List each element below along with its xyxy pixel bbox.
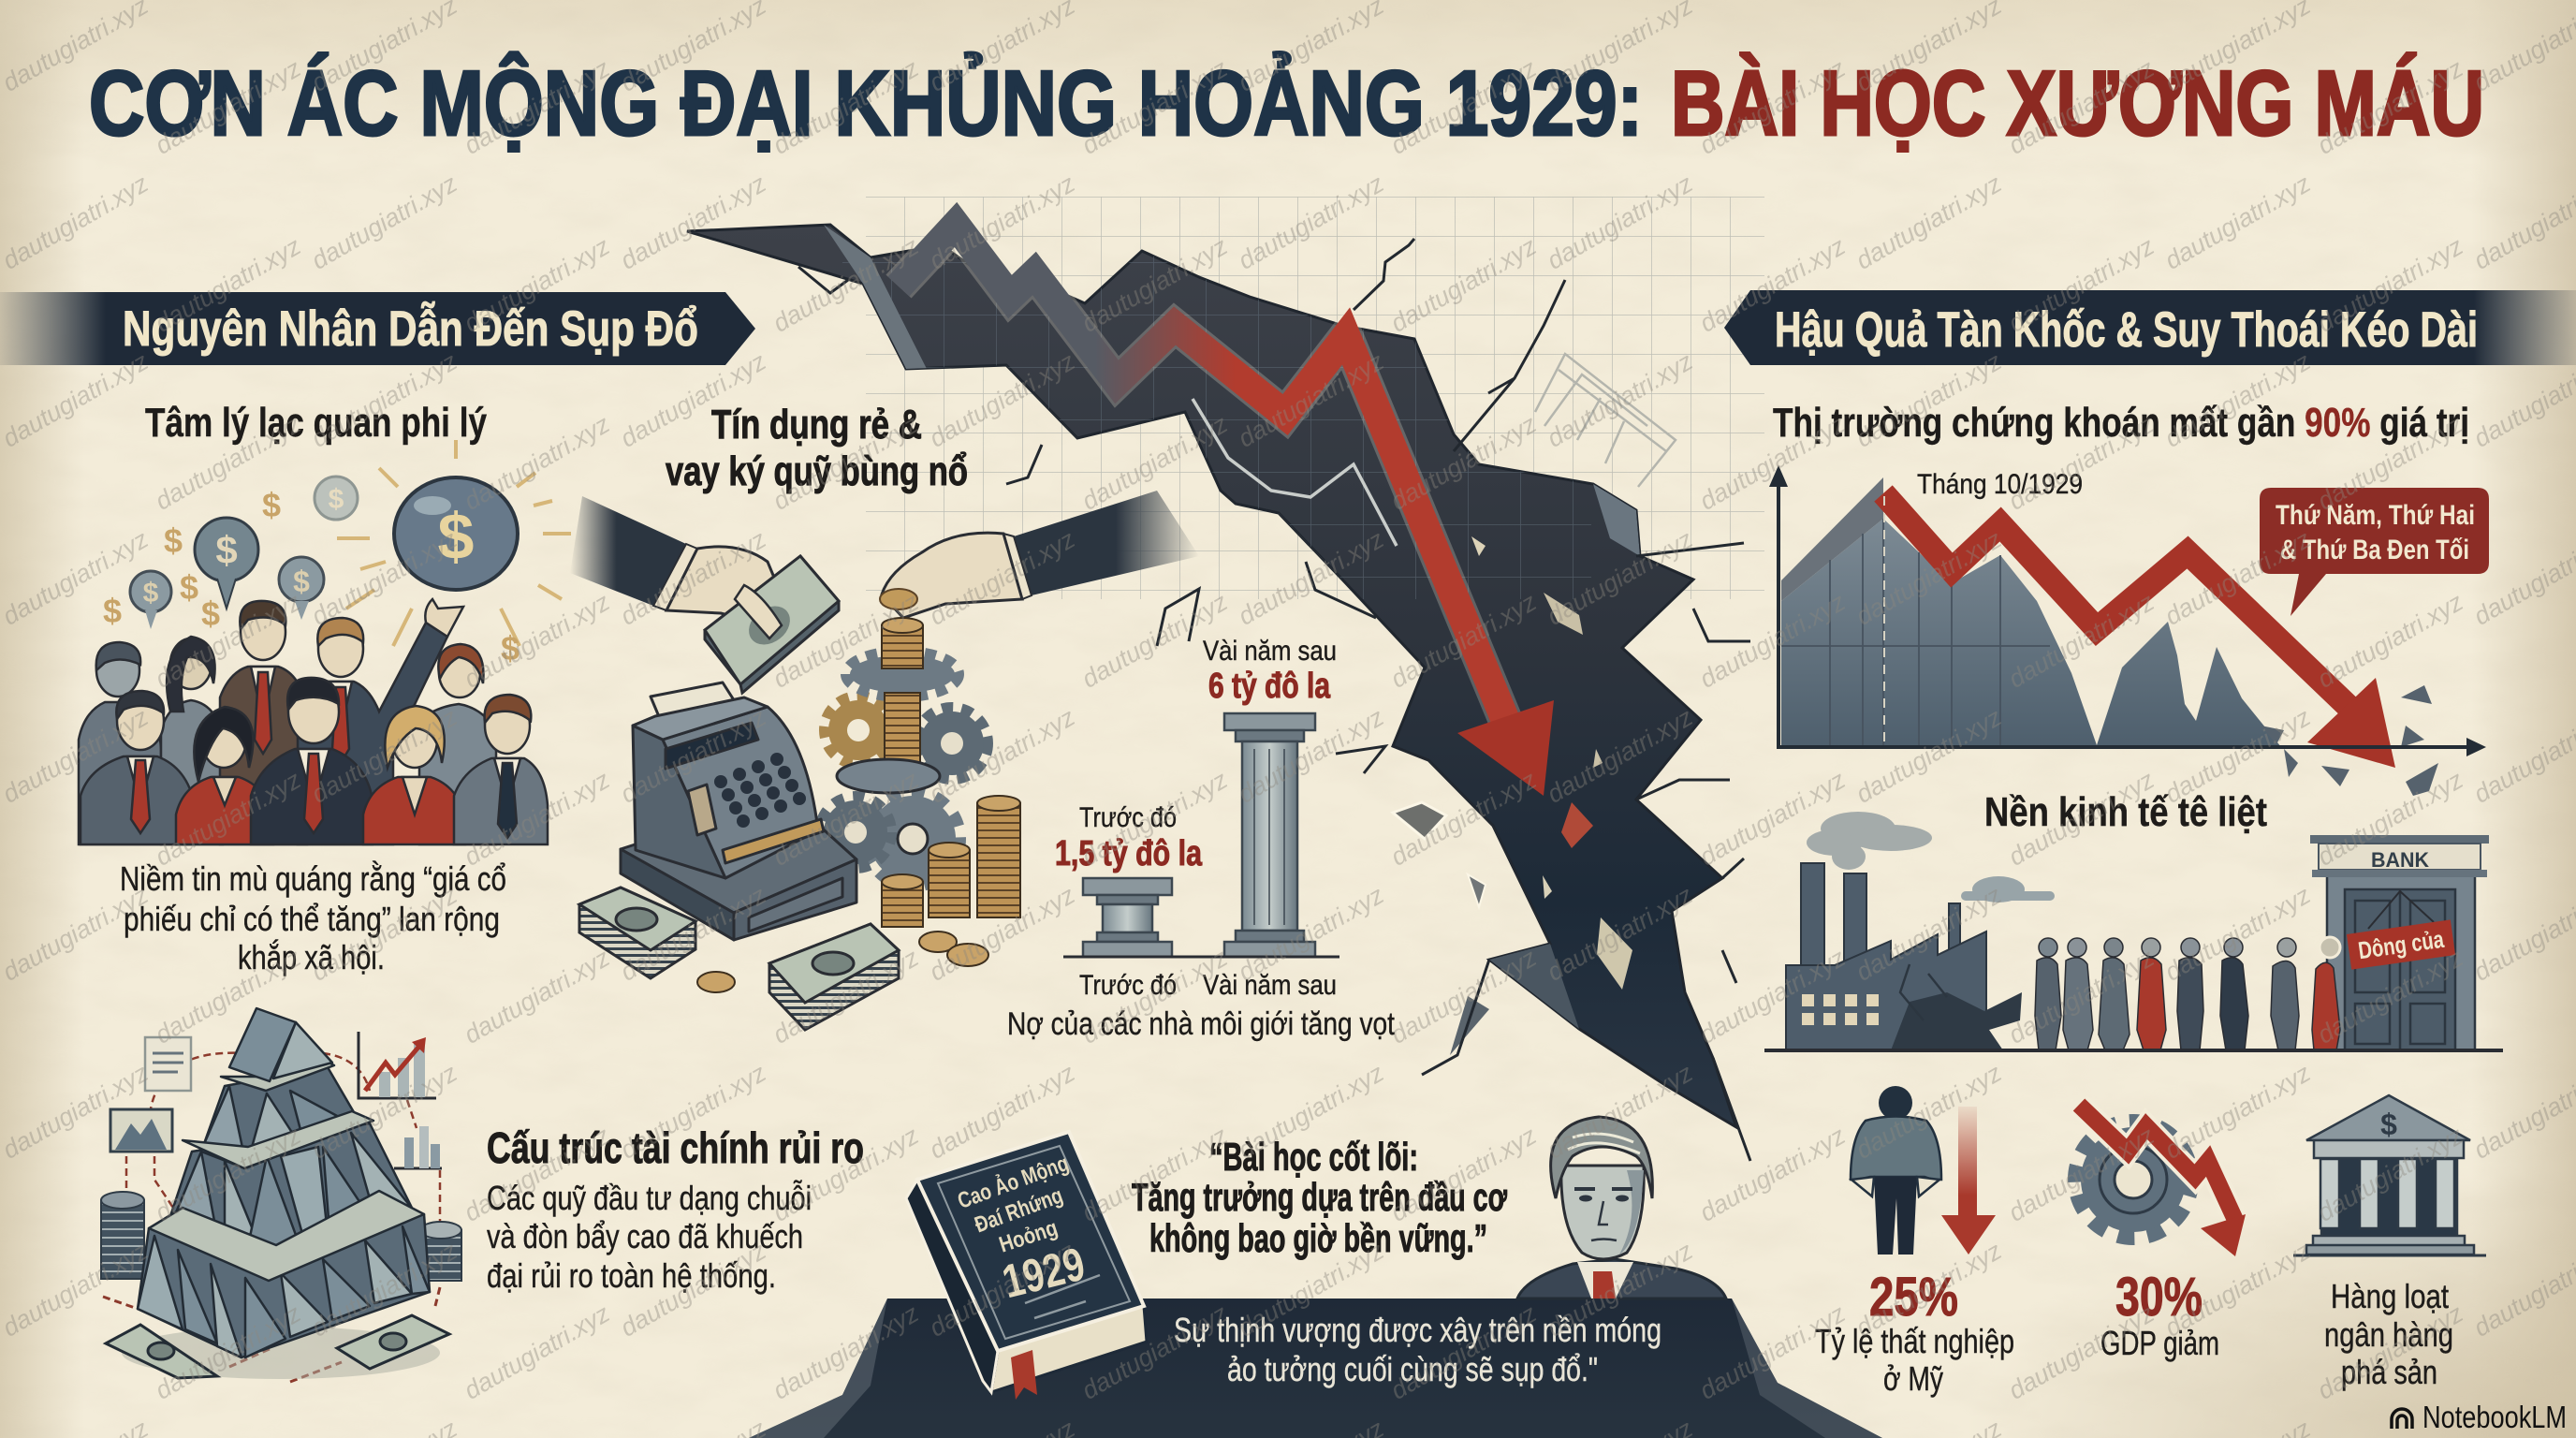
cards	[122, 1008, 440, 1379]
crack body	[687, 225, 1736, 1127]
callout: black days: & Thứ Ba Đen Tối	[2280, 535, 2469, 565]
chart: broker debt pillars: Vài năm sau	[1203, 970, 1337, 1001]
book: lessons of 1929: Cao Ảo Mộng	[954, 1149, 1072, 1214]
heading: market lost 90 percent: Thị trường chứng khoán mất gần 90% giá trị	[1773, 400, 2469, 446]
hairline cracks	[798, 239, 1750, 1161]
callout: black days: Thứ Năm, Thứ Hai	[2276, 500, 2475, 531]
chart: broker debt pillars	[1007, 636, 1395, 1042]
chart: broker debt pillars: Vài năm sau	[1203, 636, 1337, 667]
stat: bank failures	[2293, 1095, 2486, 1391]
stat: unemployment: Tỷ lệ thất nghiệp	[1815, 1322, 2014, 1360]
chart: broker debt pillars: 6 tỷ đô la	[1208, 667, 1331, 706]
bubbles: $	[438, 500, 474, 573]
body text: blind belief	[120, 859, 506, 976]
bubbles: $	[501, 629, 520, 668]
heading: irrational optimism: Tâm lý lạc quan phi lý	[145, 400, 487, 446]
illustration: factory, queue and closed bank	[1764, 812, 2503, 1050]
book: lessons of 1929: Hoỏng	[996, 1215, 1061, 1258]
gear tower	[820, 652, 988, 886]
body text: blind belief: phiếu chỉ có thể tăng” lan rộng	[124, 900, 500, 938]
heading: cheap credit: Tín dụng rẻ &	[711, 402, 922, 448]
quote: core lesson: không bao giờ bền vững.”	[1149, 1216, 1487, 1260]
stat: GDP: 30%	[2115, 1267, 2203, 1328]
coin stacks beside house	[101, 1192, 461, 1281]
quote: core lesson: Tăng trưởng dựa trên đầu cơ	[1132, 1175, 1507, 1219]
closed bank: BANK	[2371, 848, 2429, 872]
cash register	[621, 682, 856, 940]
illustration: crowd and bubbles	[79, 440, 571, 844]
bubbles: $	[143, 578, 159, 609]
stat: GDP	[2075, 1105, 2246, 1362]
zigzag crash arrow	[899, 225, 1554, 796]
linked risk documents	[103, 1032, 442, 1382]
back row people	[79, 599, 496, 844]
body text: blind belief: Niềm tin mù quáng rằng “giá cổ	[120, 859, 506, 898]
coin stacks	[697, 618, 1020, 992]
book: lessons of 1929: 1929	[997, 1238, 1090, 1308]
chart: stock market collapse: Tháng 10/1929	[1917, 469, 2083, 500]
text block: risky financial structure: Cấu trúc tài chính rủi ro	[487, 1123, 864, 1172]
stat: bank failures: Hàng loạt	[2331, 1277, 2449, 1315]
quote: core lesson	[1132, 1135, 1507, 1260]
text block: risky financial structure	[487, 1123, 864, 1295]
bubbles: $	[164, 521, 183, 560]
stat: bank failures: phá sản	[2341, 1353, 2437, 1391]
queue of people	[2035, 937, 2340, 1050]
smoke	[1807, 812, 2055, 902]
stat: bank failures: $	[2380, 1108, 2397, 1141]
book: lessons of 1929	[906, 1132, 1147, 1400]
chart: broker debt pillars: Nợ của các nhà môi giới tăng vọt	[1007, 1006, 1395, 1042]
icon: falling arrow	[1941, 1107, 1996, 1255]
book: lessons of 1929: Đaí Rhứng	[972, 1183, 1066, 1238]
heading: cheap credit	[666, 402, 968, 494]
central crack with market crash arrow	[687, 197, 1764, 1161]
stat: bank failures: ngân hàng	[2324, 1315, 2453, 1354]
crack fragments	[1393, 536, 1632, 1055]
front row people	[80, 678, 548, 844]
title: CƠN ÁC MỘNG ĐẠI KHỦNG HOẢNG 1929:	[89, 51, 1643, 154]
stat: unemployment: ở Mỹ	[1883, 1359, 1943, 1398]
bubbles: $	[215, 528, 238, 572]
stat: unemployment: 25%	[1869, 1267, 1958, 1328]
bubbles: $	[201, 594, 220, 633]
chart: stock market collapse	[1769, 465, 2486, 796]
callout: black days	[2260, 488, 2489, 616]
factory	[1786, 863, 1986, 1050]
cash stacks	[579, 888, 899, 1030]
stat: unemployment	[1815, 1086, 2014, 1398]
text block: risky financial structure: Các quỹ đầu tư dạng chuỗi	[487, 1179, 812, 1217]
portrait: elder speaker	[1517, 1117, 1726, 1299]
pedestal with closing lesson: Sự thịnh vượng được xây trên nền móng	[1174, 1311, 1661, 1349]
section banner: causes	[0, 292, 755, 365]
tall pillar	[1224, 713, 1315, 957]
right arm with coin	[880, 491, 1199, 618]
body text: blind belief: khắp xã hội.	[238, 938, 385, 976]
heading: cheap credit: vay ký quỹ bùng nổ	[666, 448, 968, 494]
text block: risky financial structure: và đòn bẩy cao đã khuếch	[487, 1217, 803, 1255]
stat: GDP: GDP giảm	[2100, 1324, 2219, 1362]
section banner: causes: Nguyên Nhân Dẫn Đến Sụp Đổ	[123, 301, 698, 357]
bubbles	[103, 440, 571, 668]
bubbles: $	[329, 484, 344, 515]
chart: broker debt pillars: 1,5 tỷ đô la	[1055, 834, 1203, 873]
icon: broken gear with falling arrow	[2075, 1105, 2246, 1256]
closed bank	[2310, 835, 2489, 1050]
left arm with cash	[570, 496, 839, 693]
closed bank: Dông của	[2356, 925, 2446, 964]
crack interior texture	[824, 225, 1640, 1029]
bubbles: $	[180, 568, 198, 607]
short pillar	[1083, 878, 1172, 957]
icon: man with empty pockets	[1851, 1086, 1941, 1255]
text block: risky financial structure: đại rủi ro toàn hệ thống.	[487, 1256, 776, 1295]
icon: bank temple	[2293, 1095, 2486, 1255]
bubbles: $	[262, 486, 281, 524]
illustration: house of cards	[101, 1008, 461, 1382]
bubbles: $	[293, 565, 310, 598]
chart: broker debt pillars: Trước đó	[1079, 802, 1177, 833]
heading: paralyzed economy: Nền kinh tế tê liệt	[1984, 789, 2267, 835]
sketch of collapsing bank building	[1535, 354, 1676, 487]
pedestal with closing lesson: ảo tưởng cuối cùng sẽ sụp đổ."	[1227, 1350, 1598, 1388]
bubbles: $	[103, 592, 122, 630]
illustration: hands, cash register, gears and coins	[570, 491, 1199, 1030]
chart: broker debt pillars: Trước đó	[1079, 970, 1177, 1001]
pedestal with closing lesson	[749, 1299, 1882, 1438]
section banner: consequences	[1724, 290, 2576, 365]
quote: core lesson: “Bài học cốt lõi:	[1209, 1135, 1418, 1179]
loose bills	[106, 1315, 449, 1378]
